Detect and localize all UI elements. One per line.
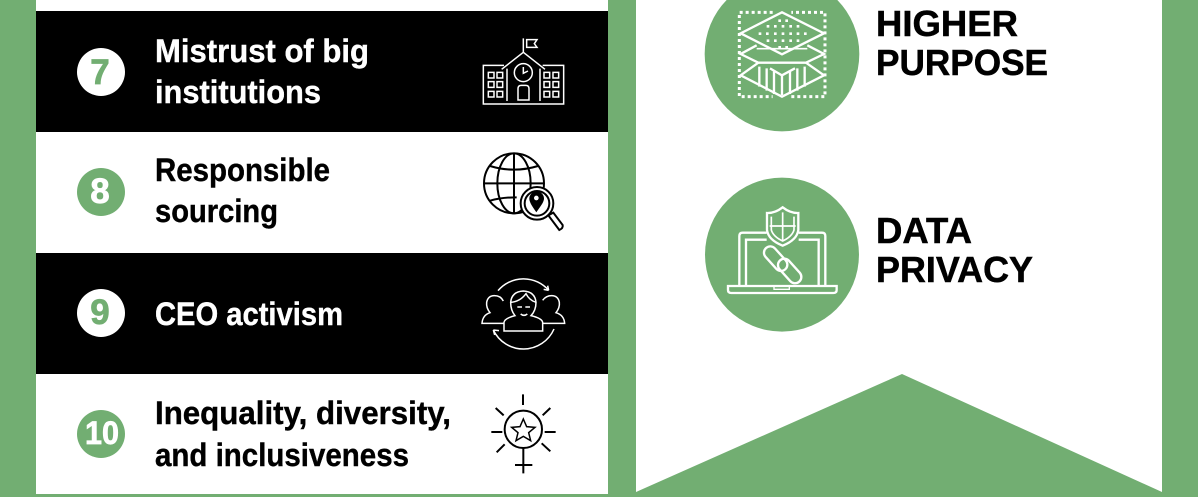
row 10 label: Inequality, diversity, <box>155 395 451 431</box>
icon: globe with magnifier and pin <box>484 153 563 230</box>
number badge 7 <box>77 48 125 96</box>
icon: female symbol with star <box>491 394 556 473</box>
icon: layered diamonds badge <box>705 0 859 131</box>
number badge 7: 7 <box>90 53 110 92</box>
row 7 label: institutions <box>155 74 321 110</box>
panel: right ribbon <box>636 0 1162 492</box>
row 10: inequality, diversity, inclusiveness <box>77 394 556 473</box>
number badge 8: 8 <box>90 172 110 211</box>
number badge 9 <box>77 289 125 337</box>
heading: data privacy: PRIVACY <box>876 249 1033 290</box>
icon: laptop with shield and chain <box>705 178 859 332</box>
row 7 label: Mistrust of big <box>155 33 369 69</box>
heading: higher purpose: PURPOSE <box>876 42 1048 83</box>
number badge 10 <box>77 410 125 458</box>
heading: data privacy: DATA <box>876 210 972 251</box>
number badge 8 <box>77 168 125 216</box>
number badge 9: 9 <box>90 293 110 332</box>
panel: left list <box>36 0 608 494</box>
row 8 label: Responsible <box>155 152 330 188</box>
heading: higher purpose: HIGHER <box>876 3 1018 44</box>
item: data privacy <box>705 178 1033 332</box>
icon: school building with clock <box>483 38 564 104</box>
row 8: responsible sourcing <box>77 152 563 230</box>
row 8 label: sourcing <box>155 193 278 229</box>
icon: leader with people and arrows <box>482 279 565 349</box>
row 9: CEO activism <box>36 253 608 374</box>
row 7: mistrust of big institutions <box>36 11 608 132</box>
row 10 label: and inclusiveness <box>155 437 409 473</box>
row 9 label: CEO activism <box>155 296 343 332</box>
number badge 10: 10 <box>85 415 119 451</box>
item: higher purpose <box>705 0 1048 131</box>
